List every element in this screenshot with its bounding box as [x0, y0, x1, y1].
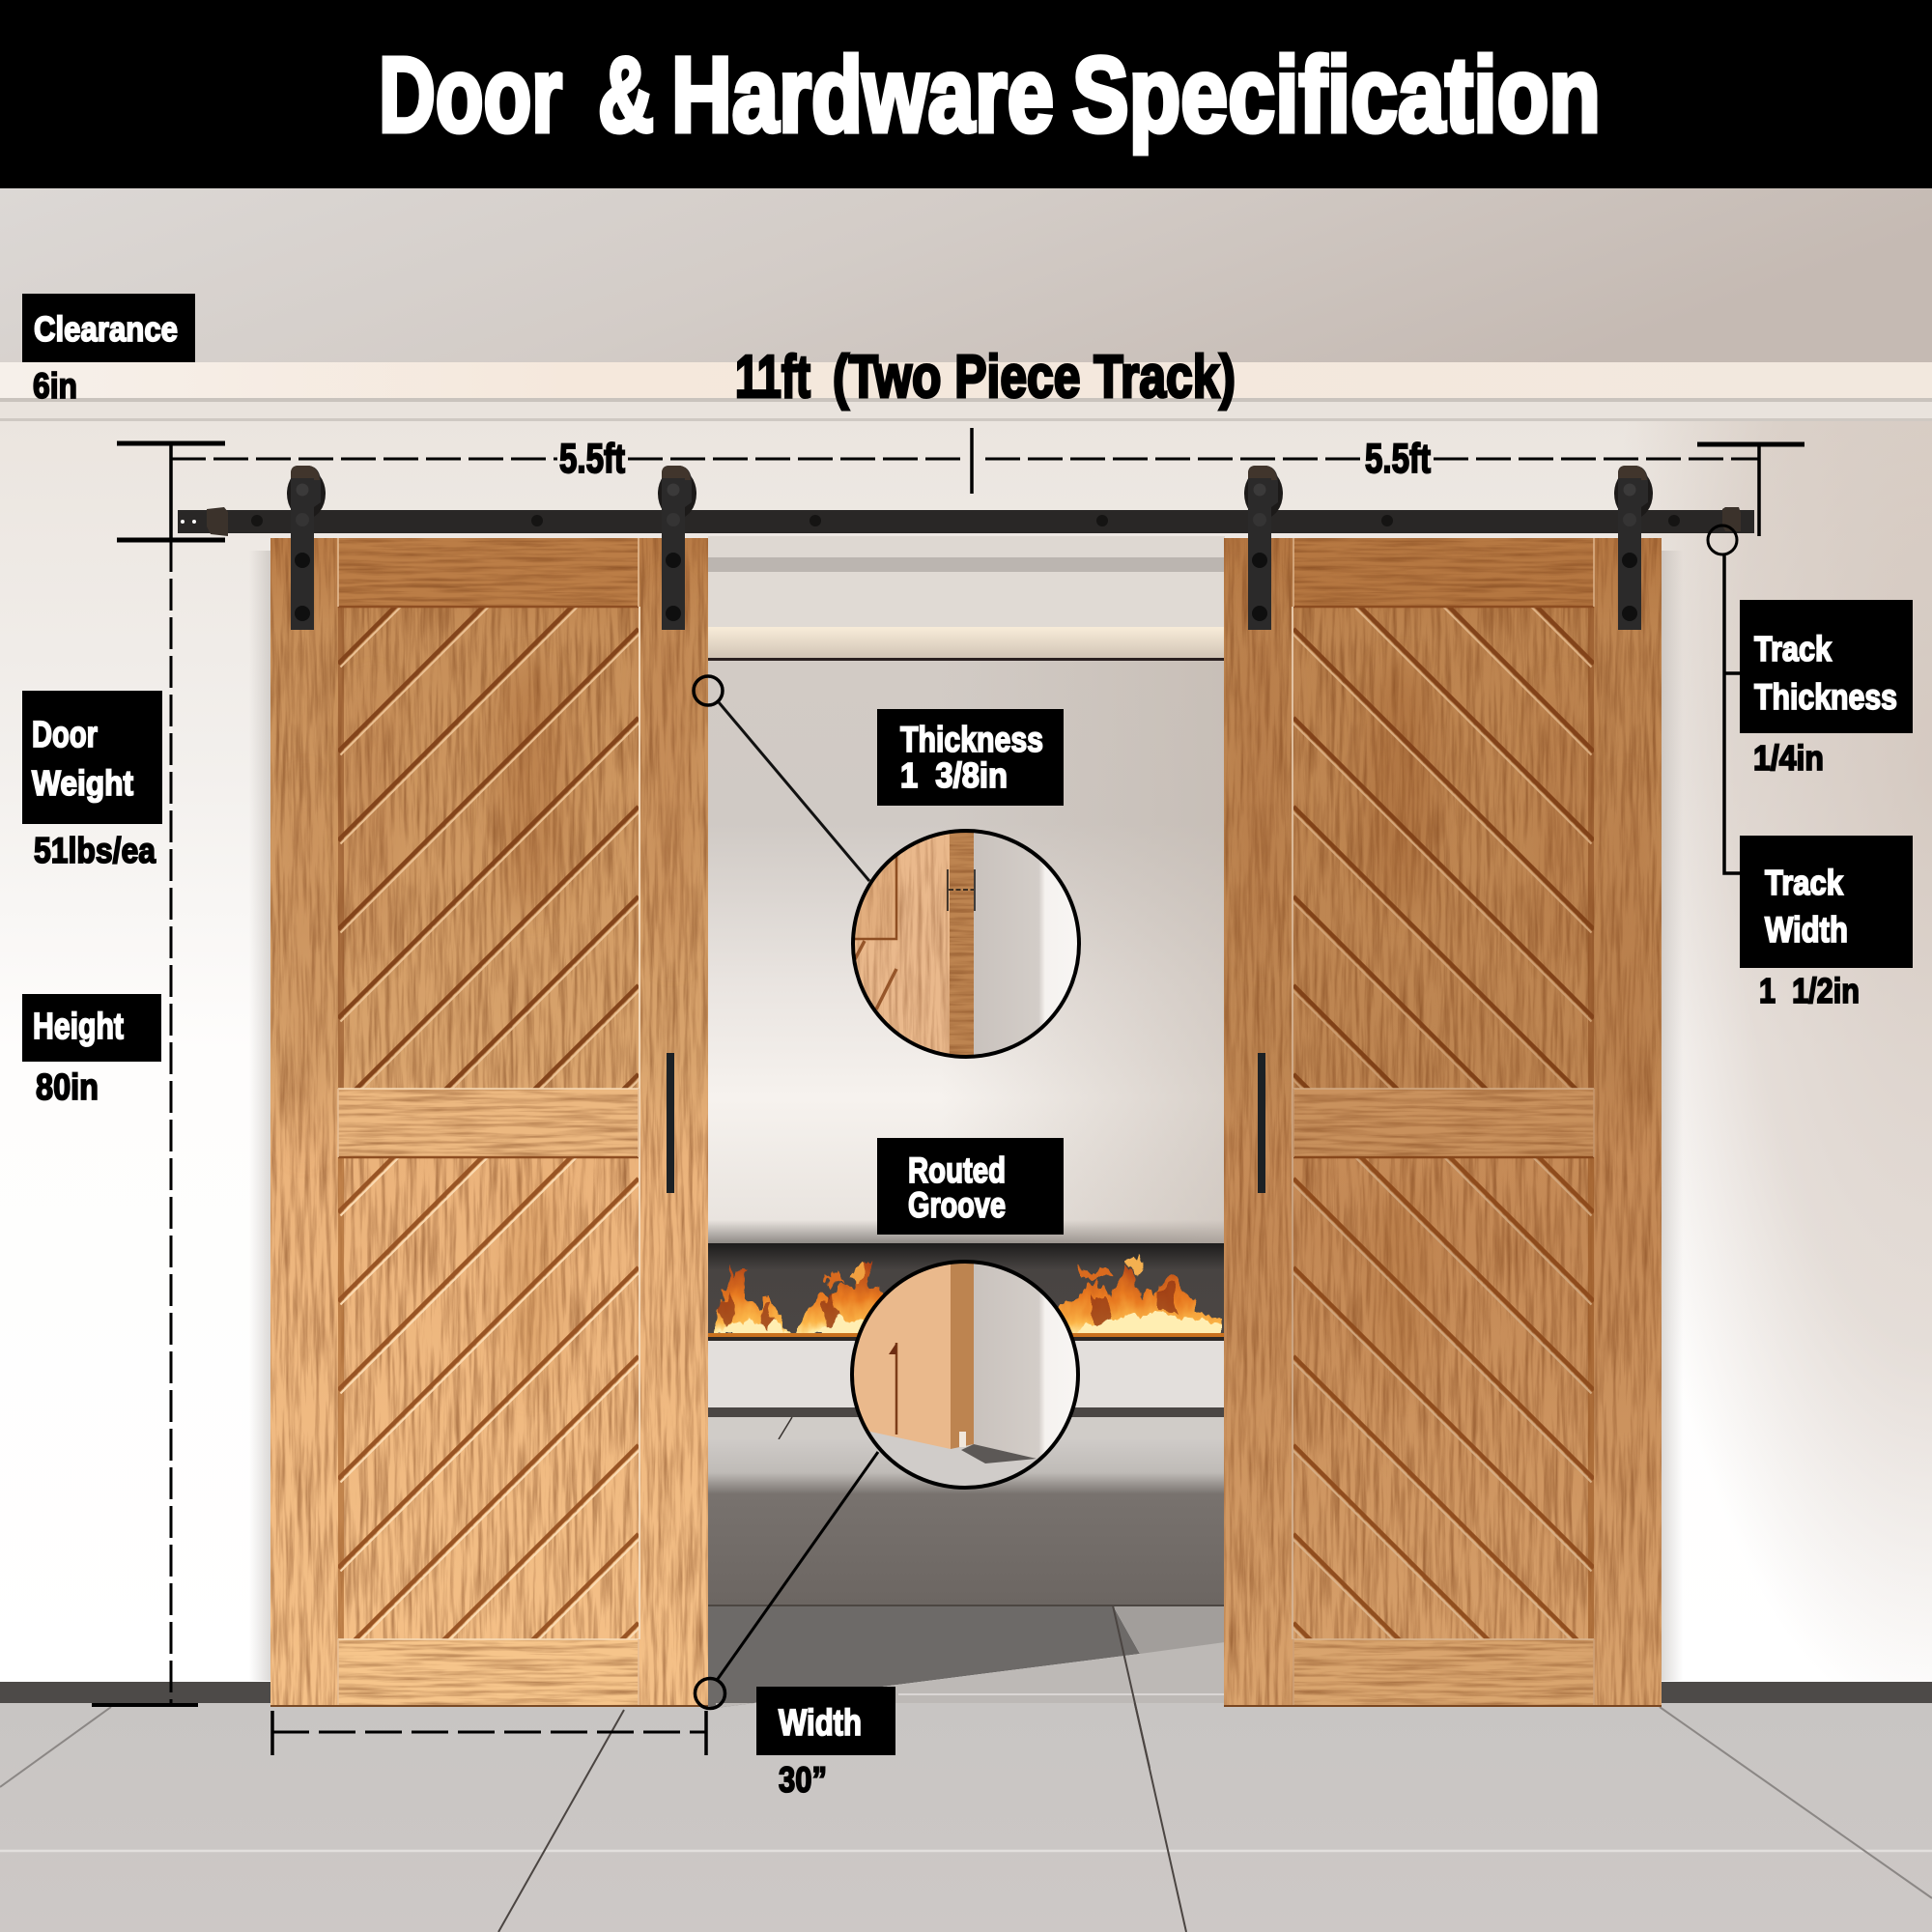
door weight label — [22, 691, 162, 870]
door shadows on wall — [249, 551, 1683, 1681]
title banner — [0, 0, 1932, 188]
left half length: 5.5ft — [559, 436, 625, 482]
routed groove label — [877, 1138, 1064, 1235]
track width label: Track — [1765, 863, 1844, 902]
track width label: Width — [1765, 910, 1848, 950]
total track length label: (Two Piece Track) — [833, 344, 1236, 411]
baseboard — [0, 1682, 1932, 1703]
clearance label: 6in — [33, 366, 77, 406]
barn door hangers — [287, 466, 1653, 630]
width label — [756, 1687, 895, 1800]
clearance label — [22, 294, 195, 406]
magnifier: door thickness detail — [850, 831, 1082, 1058]
thickness callout line and marker — [694, 676, 869, 881]
width label: 30” — [779, 1760, 827, 1800]
track length dimension lines — [117, 428, 1804, 540]
title: Specification — [1072, 36, 1601, 155]
title: Door — [379, 36, 562, 155]
floor tiles — [0, 1605, 1932, 1932]
wall background — [0, 188, 1932, 1682]
routed groove callout line and marker — [696, 1452, 878, 1708]
height label: 80in — [36, 1067, 99, 1108]
magnifier: routed groove detail — [850, 1261, 1082, 1492]
title — [379, 36, 1601, 155]
title: & — [598, 36, 654, 155]
thickness label — [877, 709, 1064, 806]
track thickness label: Thickness — [1754, 677, 1897, 717]
left door — [270, 363, 708, 1926]
height dimension line — [92, 540, 198, 1705]
title: Hardware — [671, 36, 1054, 155]
icon: fireplace flames — [710, 1256, 1223, 1337]
track width label — [1740, 836, 1913, 1010]
door weight label: Door — [32, 715, 98, 755]
width dimension line — [272, 1711, 706, 1755]
thickness label: Thickness — [900, 720, 1043, 759]
track thickness label — [1740, 600, 1913, 778]
width label: Width — [779, 1703, 862, 1744]
door weight label: 51lbs/ea — [34, 831, 156, 870]
right door — [1224, 363, 1662, 1926]
routed groove label: Groove — [908, 1185, 1006, 1225]
track thickness label: Track — [1754, 629, 1833, 668]
track rail — [178, 507, 1754, 536]
height label — [22, 994, 161, 1108]
height label: Height — [33, 1007, 124, 1047]
total track length label — [735, 344, 1236, 411]
total track length label: 11ft — [735, 344, 810, 411]
door weight label: Weight — [32, 763, 133, 803]
routed groove label: Routed — [908, 1151, 1006, 1190]
clearance label: Clearance — [34, 309, 178, 349]
right half length: 5.5ft — [1365, 436, 1431, 482]
thickness label: 1 3/8in — [900, 755, 1008, 795]
track thickness label: 1/4in — [1753, 738, 1824, 778]
background room seen between doors — [708, 536, 1225, 1768]
track width label: 1 1/2in — [1759, 971, 1860, 1010]
track callout bracket — [1708, 526, 1740, 873]
